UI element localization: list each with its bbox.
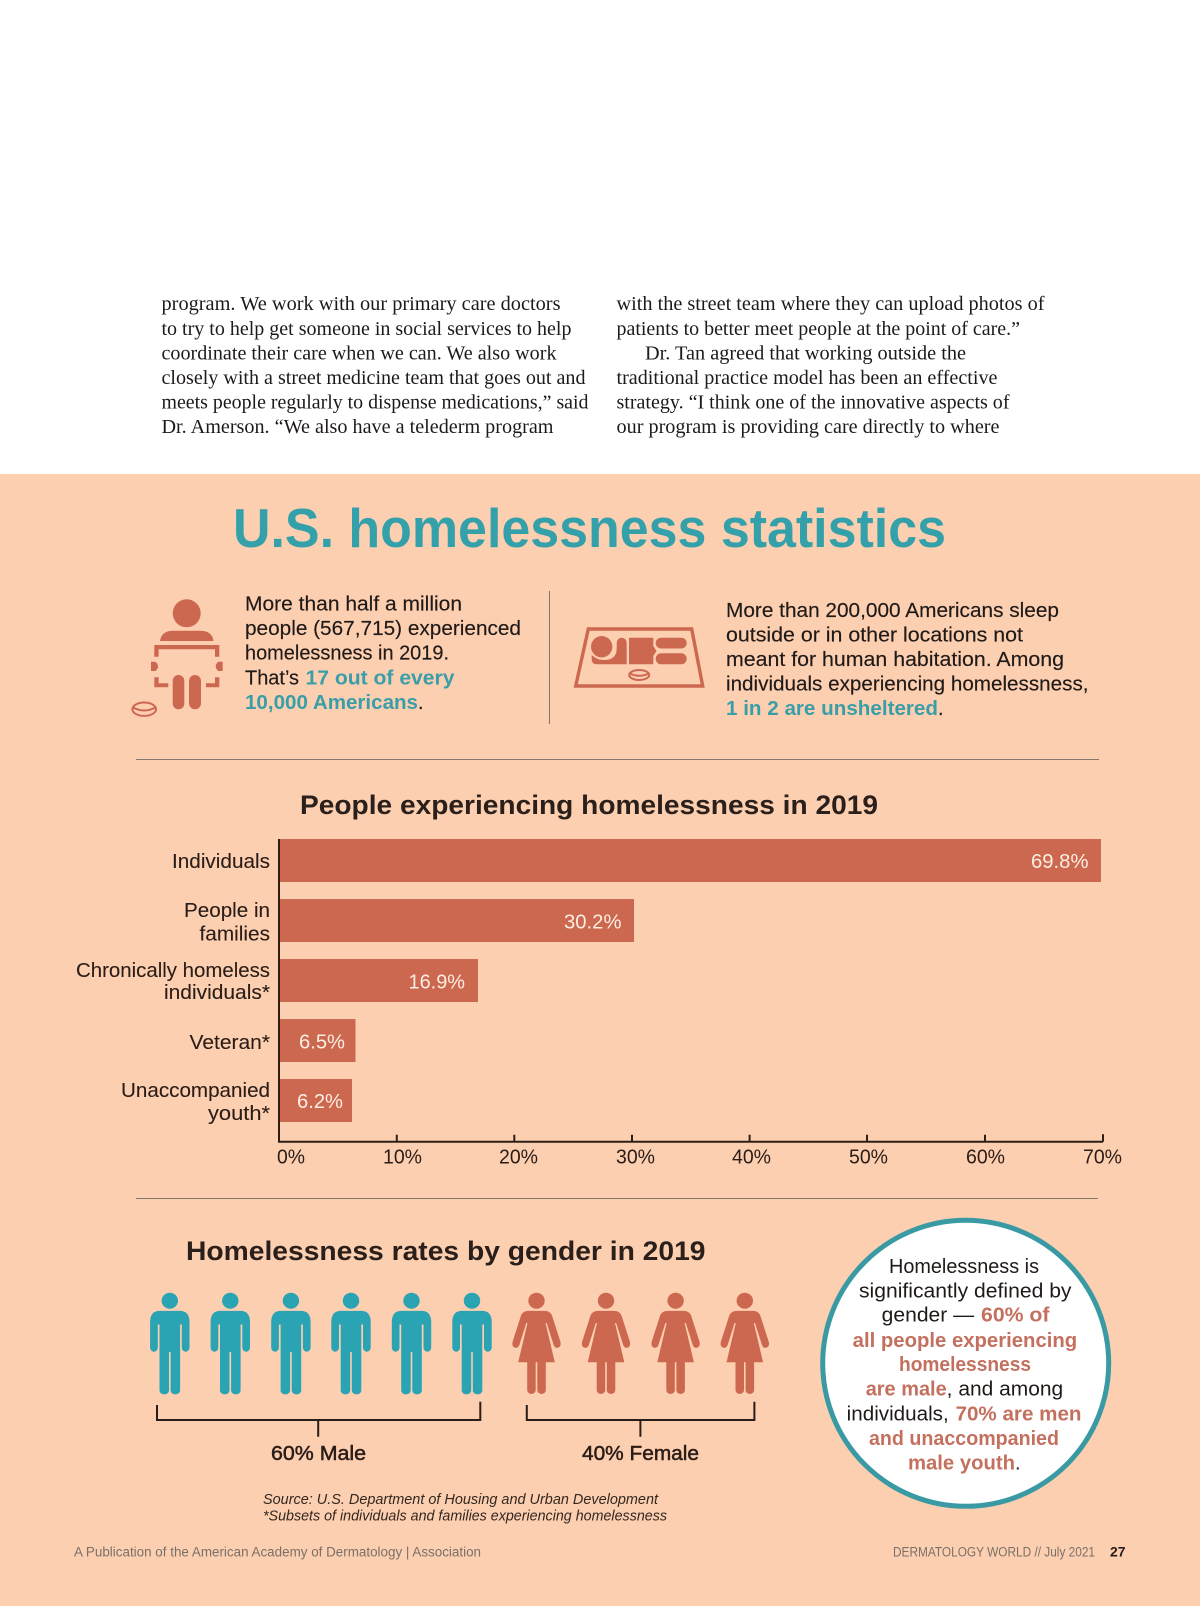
heading: gender: Homelessness rates by gender in 2019 bbox=[186, 1236, 706, 1266]
text: half a million: 10,000 Americans bbox=[245, 692, 418, 714]
panel: article text: to try to help get someone in social services to help bbox=[162, 318, 572, 340]
text: unsheltered: More than 200,000 Americans sleep bbox=[726, 600, 1059, 622]
source note: *Subsets of individuals and families experiencing homelessness bbox=[263, 1509, 667, 1525]
callout text: 60% of bbox=[981, 1305, 1050, 1327]
heading: bar chart: People experiencing homelessness in 2019 bbox=[300, 790, 878, 820]
text: half a million: . bbox=[418, 692, 424, 714]
title: U.S. homelessness statistics bbox=[233, 497, 946, 559]
axis labels: 20% bbox=[499, 1146, 538, 1168]
callout text: are male bbox=[866, 1379, 947, 1401]
axes bbox=[279, 839, 1103, 1142]
callout circle bbox=[823, 1220, 1109, 1506]
callout text: all people experiencing bbox=[853, 1330, 1077, 1352]
axis labels: 50% bbox=[849, 1146, 888, 1168]
axis labels: 30% bbox=[616, 1146, 655, 1168]
callout text: 70% are men bbox=[956, 1403, 1082, 1425]
callout text: gender — bbox=[882, 1305, 974, 1327]
callout text: male youth bbox=[908, 1453, 1015, 1475]
callout text: individuals, bbox=[847, 1403, 949, 1425]
axis labels: 40% bbox=[732, 1146, 771, 1168]
source note: Source: U.S. Department of Housing and Urban Development bbox=[263, 1492, 659, 1508]
panel: article text bbox=[162, 293, 1045, 438]
bar values: 16.9% bbox=[408, 972, 465, 994]
panel: article text: coordinate their care when we can. We also work bbox=[162, 342, 556, 364]
text: half a million: 17 out of every bbox=[306, 667, 455, 689]
callout text: significantly defined by bbox=[859, 1281, 1072, 1303]
panel: article text: patients to better meet people at the point of care.” bbox=[616, 318, 1020, 340]
axis labels: 10% bbox=[383, 1146, 422, 1168]
category labels: People in bbox=[184, 900, 270, 922]
icon: person sitting with sign bbox=[132, 599, 223, 716]
callout text: . bbox=[1015, 1453, 1021, 1475]
panel: article text: Dr. Tan agreed that working outside the bbox=[645, 342, 966, 364]
category labels: Individuals bbox=[172, 851, 270, 873]
category labels: families bbox=[200, 924, 270, 946]
text: half a million bbox=[245, 594, 521, 714]
callout text bbox=[847, 1256, 1082, 1475]
axis labels: 0% bbox=[277, 1146, 305, 1168]
bar values: 6.5% bbox=[299, 1032, 345, 1054]
panel: article text: closely with a street medicine team that goes out and bbox=[162, 367, 586, 389]
label: 60% male: 60% Male bbox=[271, 1443, 366, 1465]
category labels bbox=[76, 851, 270, 1125]
bars bbox=[280, 839, 1101, 1122]
label: 40% female: 40% Female bbox=[582, 1443, 699, 1465]
category labels: Unaccompanied bbox=[121, 1080, 270, 1102]
callout text: , and among bbox=[947, 1379, 1063, 1401]
text: unsheltered: . bbox=[938, 698, 944, 720]
category labels: youth* bbox=[208, 1103, 270, 1125]
axis labels: 70% bbox=[1083, 1146, 1122, 1168]
bar chart bbox=[76, 839, 1122, 1168]
panel: article text: strategy. “I think one of the innovative aspects of bbox=[616, 392, 1010, 414]
text: unsheltered: meant for human habitation. Among bbox=[726, 649, 1064, 671]
callout text: and unaccompanied bbox=[869, 1428, 1059, 1450]
category labels: individuals* bbox=[164, 982, 270, 1004]
axis labels bbox=[277, 1146, 1122, 1168]
text: half a million: More than half a million bbox=[245, 594, 462, 616]
vertical divider bbox=[548, 591, 550, 724]
text: half a million: homelessness in 2019. bbox=[245, 643, 449, 665]
bracket: female bbox=[527, 1402, 754, 1437]
bar values bbox=[297, 851, 1089, 1113]
icons: female figures bbox=[512, 1293, 769, 1394]
source note bbox=[263, 1492, 667, 1525]
bracket: male bbox=[157, 1402, 480, 1437]
text: half a million: That’s bbox=[245, 667, 299, 689]
text: unsheltered: individuals experiencing homelessness, bbox=[726, 674, 1088, 696]
callout text: Homelessness is bbox=[889, 1256, 1039, 1278]
bar values: 6.2% bbox=[297, 1091, 343, 1113]
panel: article text: with the street team where they can upload photos of bbox=[616, 293, 1045, 315]
bar values: 69.8% bbox=[1031, 851, 1089, 873]
page number: 27 bbox=[1110, 1544, 1126, 1560]
panel: article text: traditional practice model has been an effective bbox=[616, 367, 998, 389]
bar values: 30.2% bbox=[564, 912, 622, 934]
text: unsheltered: 1 in 2 are unsheltered bbox=[726, 698, 938, 720]
icons: male figures bbox=[150, 1293, 492, 1394]
footer right: DERMATOLOGY WORLD // July 2021 bbox=[893, 1545, 1095, 1560]
text: unsheltered: outside or in other locations not bbox=[726, 624, 1023, 646]
category labels: Veteran* bbox=[190, 1032, 270, 1054]
icon: person sleeping on mat bbox=[576, 629, 703, 686]
panel: article text: meets people regularly to dispense medications,” said bbox=[162, 392, 588, 414]
category labels: Chronically homeless bbox=[76, 960, 270, 982]
footer left: A Publication of the American Academy of Dermatology | Association bbox=[74, 1545, 481, 1560]
panel: peach background bbox=[0, 474, 1200, 1606]
text: unsheltered bbox=[726, 600, 1088, 720]
panel: article text: Dr. Amerson. “We also have a telederm program bbox=[162, 416, 554, 438]
panel: article text: our program is providing care directly to where bbox=[616, 416, 1000, 438]
panel: article text: program. We work with our primary care doctors bbox=[162, 293, 561, 315]
axis labels: 60% bbox=[966, 1146, 1005, 1168]
text: half a million: people (567,715) experienced bbox=[245, 618, 521, 640]
callout text: homelessness bbox=[899, 1354, 1031, 1376]
